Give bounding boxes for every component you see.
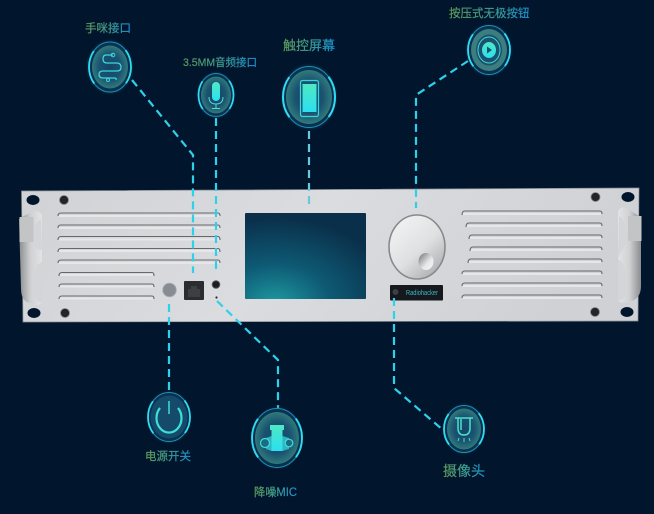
rotary knob — [389, 215, 445, 279]
label: stepless push knob: 按压式无极按钮 — [449, 6, 530, 20]
leader: power — [168, 304, 170, 392]
label: touch screen: 触控屏幕 — [283, 38, 335, 53]
icon: microphone — [196, 71, 236, 119]
icon: phone — [280, 63, 338, 131]
device front panel — [19, 188, 642, 322]
left handle — [19, 211, 42, 305]
icon: play knob — [465, 23, 513, 77]
label: power: 电源开关 — [145, 449, 191, 463]
dashed leader lines — [132, 61, 468, 430]
leader: rotary knob — [416, 61, 468, 208]
label: camera: 摄像头 — [443, 463, 485, 479]
camera badge — [390, 285, 443, 300]
leader: 3.5mm jack — [215, 118, 217, 273]
label: mic socket: 手咪接口 — [85, 21, 131, 35]
right vents — [462, 211, 602, 298]
icon: mic socket — [86, 39, 134, 95]
icon: power — [146, 390, 192, 444]
panel body — [22, 188, 639, 322]
leader: touch screen — [308, 131, 310, 208]
mic pinhole — [215, 296, 218, 299]
RJ45 mic socket — [184, 281, 204, 300]
3.5mm jack — [212, 281, 220, 288]
power button — [163, 283, 176, 297]
rack mounting holes — [26, 192, 634, 318]
touch screen — [245, 213, 366, 299]
camera badge: Radiohacker — [406, 290, 439, 297]
icon: noise mic — [250, 406, 304, 470]
label: 3.5mm jack: 3.5MM音频接口 — [183, 55, 257, 69]
left vents — [58, 213, 220, 299]
screws — [60, 192, 600, 318]
leader: mic socket — [132, 80, 193, 273]
leader: camera — [394, 298, 443, 430]
label: noise reduction mic: 降噪MIC — [254, 485, 297, 499]
leader: noise mic — [217, 301, 278, 408]
right handle — [618, 207, 642, 303]
icon: camera — [442, 403, 486, 455]
